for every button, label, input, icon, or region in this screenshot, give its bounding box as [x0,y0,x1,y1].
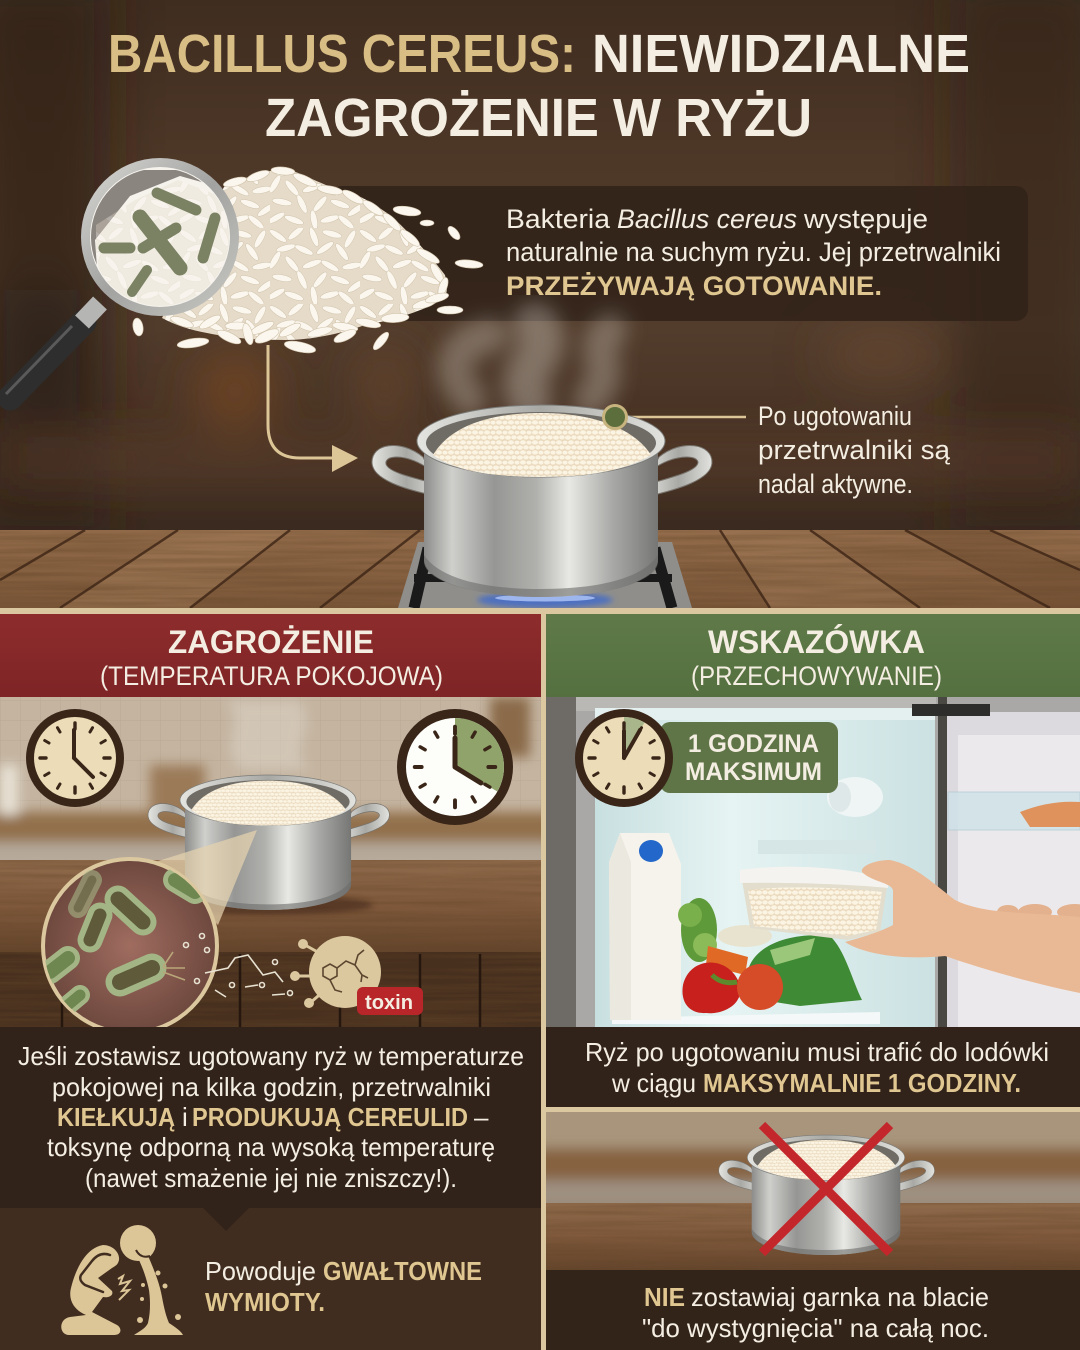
panel: danger explanation: KIEŁKUJĄ [57,1102,175,1132]
panel: danger header: (TEMPERATURA POKOJOWA) [100,661,443,691]
icon: microscope lens with bacteria [41,857,219,1035]
icon: gas stove [398,542,692,608]
icon: clock with elapsed hours [397,709,513,825]
icon: rice pile [132,166,483,355]
panel: danger explanation [0,1027,541,1208]
panel: warning text: "do wystygnięcia" na całą noc. [642,1313,989,1343]
callout: zoom cone [155,830,257,925]
badge: one hour maximum [660,722,838,793]
icon: vomiting person [61,1225,183,1335]
badge: one hour maximum: 1 GODZINA [688,730,819,758]
label: still active spores: Po ugotowaniu [758,401,912,431]
icon: marker dot [604,406,626,428]
title: NIEWIDZIALNE [592,24,970,84]
panel: do not leave pot scene [546,1112,1080,1270]
panel: danger header: ZAGROŻENIE [168,624,374,660]
label: still active spores [625,401,951,499]
divider [546,1107,1080,1112]
divider lines [0,608,1080,1350]
panel: warning text [546,1270,1080,1350]
panel: danger explanation: pokojowej na kilka godzin, przetrwalniki [52,1072,491,1102]
panel: storage instruction: w ciągu [611,1068,696,1098]
arrow: rice to pot [268,345,358,472]
panel: intro text box: Bacillus cereus [617,204,797,234]
top background: blurred kitchen [0,0,1080,540]
label: still active spores: nadal aktywne. [758,469,913,499]
panel: danger explanation: toksynę odporną na wysoką temperaturę [47,1132,495,1162]
panel: symptom: WYMIOTY. [205,1287,325,1317]
panel: intro text box: PRZEŻYWAJĄ GOTOWANIE. [506,271,882,301]
panel: intro text box: naturalnie na suchym ryżu. Jej przetrwalniki [506,237,1001,267]
panel: tip header: WSKAZÓWKA [708,624,925,660]
panel: symptom: Powoduje [205,1256,316,1286]
title [108,24,970,148]
panel: danger scene [0,697,561,1027]
badge: toxin [357,987,423,1015]
panel: intro text box: Bakteria [506,204,611,234]
panel: danger explanation: (nawet smażenie jej nie zniszczy!). [85,1163,457,1193]
panel: intro text box [330,186,1028,321]
icon: milk carton [609,833,681,1020]
panel: symptom [0,1208,541,1350]
steam over pot [455,325,610,400]
icon: rice container and hand [740,860,1080,993]
panel: storage instruction: MAKSYMALNIE 1 GODZINY. [703,1068,1021,1098]
icon: pot crossed out [719,1125,935,1255]
panel: tip header [546,614,1080,698]
icon: toxin particles [163,934,292,997]
panel: danger explanation: i [182,1102,188,1132]
panel: storage instruction: Ryż po ugotowaniu musi trafić do lodówki [585,1037,1049,1067]
icon: pot on counter [148,775,389,910]
panel: intro text box: występuje [803,204,928,234]
wooden table [0,530,1080,610]
icon: magnifying glass with bacteria [6,158,239,398]
panel: storage instruction [546,1027,1080,1107]
icon: toxin molecule [290,936,381,1008]
icon: clock one hour [575,709,673,807]
badge: one hour maximum: MAKSIMUM [685,758,822,786]
panel: danger header [0,614,541,698]
panel: tip header: (PRZECHOWYWANIE) [691,661,942,691]
panel: danger explanation: Jeśli zostawisz ugotowany ryż w temperaturze [18,1041,524,1071]
panel: warning text: zostawiaj garnka na blacie [691,1282,989,1312]
panel: fridge scene [546,697,1080,1027]
icon: clock room temperature [26,709,124,807]
icon: vegetables [678,898,862,1013]
badge: toxin: toxin [365,992,413,1014]
label: still active spores: przetrwalniki są [758,435,951,465]
panel: danger explanation: – [474,1102,489,1132]
title: BACILLUS CEREUS: [108,24,576,84]
icon: main pot with rice [372,405,712,597]
panel: danger explanation: PRODUKUJĄ CEREULID [192,1102,468,1132]
panel: warning text: NIE [644,1282,685,1312]
panel: symptom: GWAŁTOWNE [323,1256,482,1286]
title: ZAGROŻENIE W RYŻU [265,88,812,148]
